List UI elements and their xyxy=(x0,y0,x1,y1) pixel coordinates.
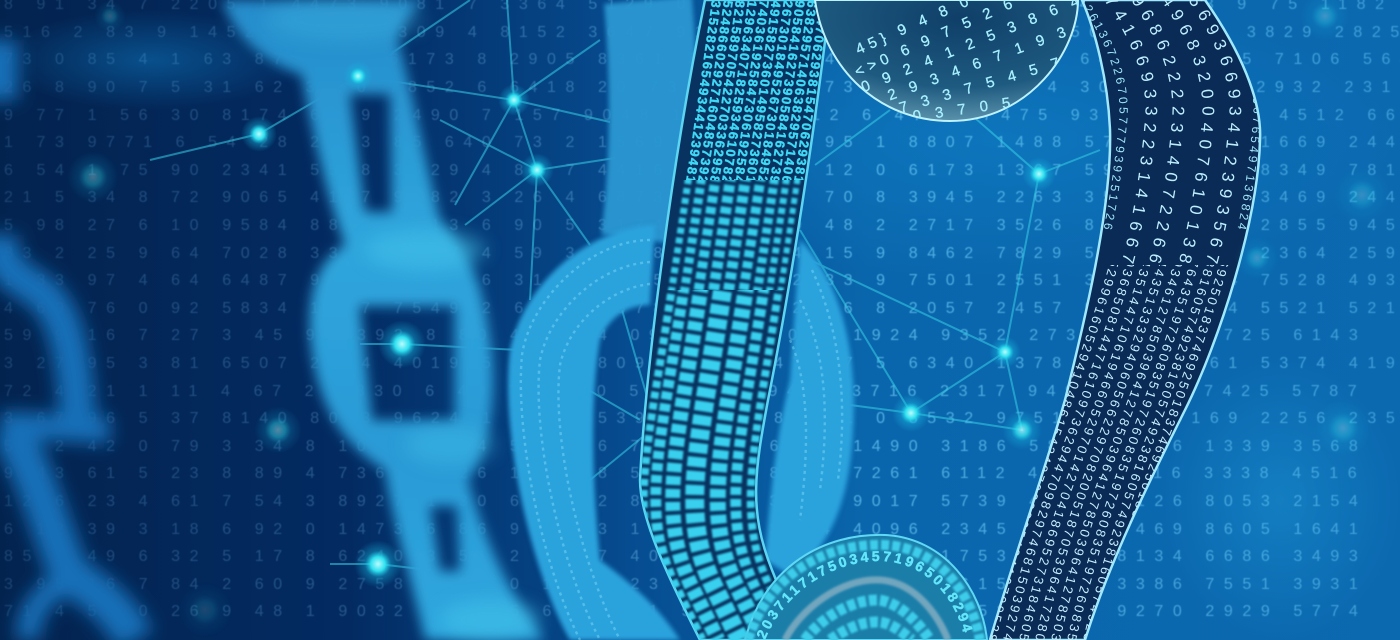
background number field: 4 69 76 0 92 5834 10 7 7549 2 62 1 4578 09 3492 66 8 2057 2457 9834 5414 5521 5214 xyxy=(4,300,1400,317)
background number field: 3 67 96 5 37 8140 80 3 9624 1 16 8 5394 16 2789 41 0 8532 9751 8122 4169 2256 2358 xyxy=(4,410,1400,427)
centre back link around the main strand xyxy=(508,225,854,640)
centre link digit texture xyxy=(521,240,842,640)
right digital strand xyxy=(988,0,1262,640)
background number field: 85 1 49 6 32 5 17 8 6240 3 51 2 9367 40 2853 71 6 6429 1753 6290 8134 6686 3493 xyxy=(4,548,1367,565)
background number field: 3 27 95 3 81 6507 27 4 4019 5 73 6 8095 64 1847 27 5 6340 1378 1472 8261 5374 4195 xyxy=(4,355,1400,372)
upper strand digits, large xyxy=(1106,0,1242,264)
background number field: 73 0 85 4 1 63 87 5 92 6173 8 2905 8361 74 9053 4 78 5628 1 37 64291 3385 7106 5645 xyxy=(4,51,1400,68)
lower strand digits, small: 4692501837469250183746925018374692501837469 xyxy=(1130,265,1228,523)
upper strand digits: 49158273601495827360149 xyxy=(746,0,781,180)
blurred chain silhouette with link holes xyxy=(222,0,545,640)
upper strand digits, large: 9686222231407226643 xyxy=(1132,0,1184,263)
background number field: 6 12 39 3 18 6 92 0 1473 6 86 9 5073 14 6781 25 4 4096 2345 1563 3469 8605 1641 xyxy=(4,521,1367,538)
far left chain xyxy=(0,40,135,640)
background number field: 3 95 16 7 84 2 60 9 2758 4 93 0 1758 23 4096 82 1 3714 4615 2097 3386 7551 3931 xyxy=(4,576,1367,593)
background number field: 9 43 61 5 23 8 89 4 7361 0 26 1 4078 52 1946 85 3 7261 6112 4893 7016 3338 4516 xyxy=(4,465,1366,482)
upper strand digits xyxy=(686,0,824,180)
background number field: 9 77 1 56 30 8174 66 9 2490 7 157 9048 13 5371 12 6 4739 7475 9315 6 7479 4512 6684 xyxy=(4,107,1400,124)
upper strand digits, large: 4968320040761013844 xyxy=(1164,0,1214,263)
lower strand digits, small: 5764351972608351972608351972608351972608351 xyxy=(1068,265,1198,640)
upper strand digits: 26730184952673018495267 xyxy=(758,0,793,180)
back chain link top: vertical strand xyxy=(645,0,653,240)
chain bright highlights xyxy=(265,0,540,640)
background number field: 72 4 21 1 11 4 67 2 5830 6 49 7 2630 58 6021 94 3 3716 2317 9496 3180 7425 5787 xyxy=(4,383,1366,400)
upper strand digits: 74036192584730619258473 xyxy=(734,1,770,180)
upper strand digits, large: 5693669341239356733 xyxy=(1190,0,1242,264)
background number field: 83 2 25 9 64 7028 33 5 1267 4 59 3 7248 65 7034 15 9 8462 7829 5431 6799 2364 2591 xyxy=(4,245,1400,262)
upper strand edge digits: 5261367226705777939251726 xyxy=(1084,1,1128,230)
digits on bottom link: 20371171750345719650182947365018294 xyxy=(756,551,972,640)
top sphere link: 3 2 9 3 4 6 7 1 9 3 5 0 7 xyxy=(864,0,1136,112)
background number field: 71 4 53 0 26 9 48 1 9032 7 19 5 6203 71 5713 24 6 8095 3058 6124 9270 2929 5774 xyxy=(4,603,1367,620)
bottom chain link arc xyxy=(742,530,988,640)
lower strand bead rows xyxy=(640,290,784,640)
upper strand digits: 12963407182593461078259 xyxy=(722,0,757,180)
upper strand digits: 82158970542270336295810 xyxy=(710,0,745,180)
upper strand digits: 31528216549344123948157 xyxy=(686,0,721,180)
top sphere link: 3 7 3 3 7 5 4 5 7 0 6 9 xyxy=(876,35,1131,123)
upper strand digits: 63829571406382957140638 xyxy=(782,0,816,180)
upper strand edge digits: 9641385704336765497136824 xyxy=(1238,98,1259,229)
network lines xyxy=(150,0,1100,570)
background number field: 12 6 23 4 61 7 54 3 8927 1 30 6 7142 83 5420 36 8 9017 5739 4914 7126 8053 2154 xyxy=(4,493,1367,510)
lower strand digits, small: 2381605749238160574923816057492381605749238 xyxy=(1084,265,1214,640)
middle strand bead rows xyxy=(666,180,802,290)
background number field: 6 54 1 75 90 2341 55 8 3629 4 80 7 4416 25 3789 12 0 6173 1367 5930 8341 8349 7816 xyxy=(4,162,1400,179)
background number field: 21 5 34 8 72 9065 41 7 9082 3 26 4 6873 01 2456 70 8 3945 2263 3588 1634 3469 2445 xyxy=(4,189,1400,206)
lower strand digits, small xyxy=(990,265,1228,640)
upper strand digits: 15470629381547062938154 xyxy=(794,21,824,180)
top sphere link: 3 0 3 7 0 5 1 7 4 6 8 xyxy=(889,78,1128,128)
main digital strand xyxy=(638,0,826,640)
background number field: 59 9 16 7 27 3 45 9 6392 8 80 4 1564 09 7283 50 6 1924 9352 2736 1984 6725 6143 xyxy=(4,327,1367,344)
background number field: 1 33 97 4 64 6487 91 0 5387 6 31 6 2095 37 8612 33 9 7501 2551 3926 3934 7528 4936 xyxy=(4,272,1400,289)
upper strand edge digits xyxy=(1084,1,1259,230)
background number field: 56 2 42 0 79 3 34 8 1086 9 74 5 9216 74 3058 67 1 1490 3186 5889 4206 1339 3568 xyxy=(4,438,1367,455)
background number field: 1 73 9771 6 54 28 22 3 85 640 73 2 1569 83 6274 95 1 8807 1488 5796 8325 1669 2441 xyxy=(4,134,1400,151)
top sphere link xyxy=(814,0,1079,122)
background number field: 26 8 90 7 5 31 62 33 0 7852 6 6418 20 7354 1862 73 5 9216 55 4 3041 8862 2932 2315 xyxy=(4,79,1400,96)
upper strand digits: 52486602927160485739214 xyxy=(698,0,733,180)
upper strand digits: 90584162739058416273905 xyxy=(770,0,805,180)
background number field: 5 98 27 6 10 9584 88 2 4713 6 90 5 3174 86 9150 48 2 2717 3526 8252 7878 2855 9458 xyxy=(4,217,1400,234)
lower strand digits, small: 1934612785039641278503964127850396412785039 xyxy=(1052,265,1182,640)
upper strand digits, large: 7416693322314166722 xyxy=(1106,0,1158,264)
background number field: 516 2 83 9 14526 77 8 2309 4 8152 3647 91 2785 1 34 2378 49 1 5038 7164 3829 2825 xyxy=(4,24,1400,41)
